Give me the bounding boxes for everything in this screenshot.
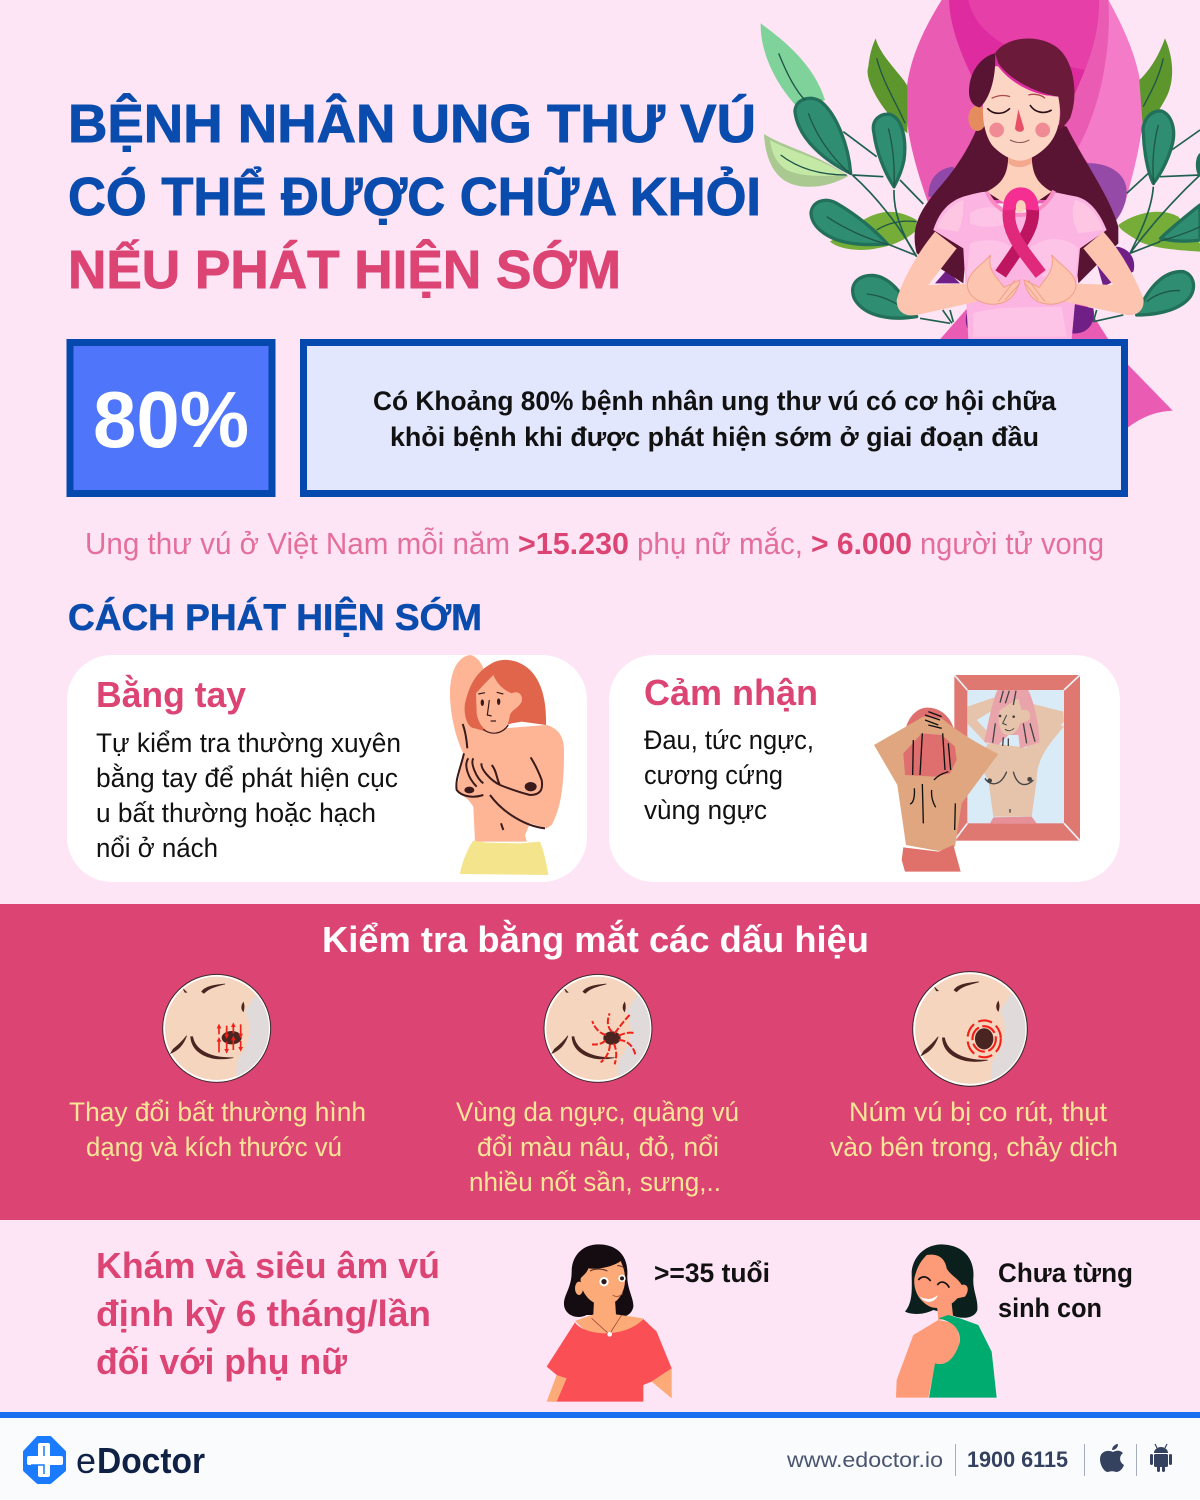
chest ribbon xyxy=(1001,194,1041,274)
illustration: self-check by hand xyxy=(450,655,564,875)
statistics line: > 6.000 xyxy=(811,527,912,561)
panel: by feeling xyxy=(609,655,1120,882)
label: never given birth: sinh con xyxy=(998,1293,1102,1323)
big ribbon behind woman xyxy=(906,0,1173,428)
caption: shape change xyxy=(69,1097,366,1162)
arms and hands xyxy=(897,232,1144,315)
title xyxy=(68,93,761,300)
woman figure xyxy=(915,38,1118,339)
statistics line: >15.230 xyxy=(518,527,629,561)
caption: nipple retraction xyxy=(830,1097,1118,1162)
card heading: Cảm nhận xyxy=(644,672,818,713)
caption: skin color change: đổi màu nâu, đỏ, nổi xyxy=(477,1132,719,1162)
purple shapes xyxy=(928,163,1134,333)
card body xyxy=(96,728,401,863)
illustration: woman in red shirt xyxy=(547,1244,672,1402)
card body: cương cứng xyxy=(644,760,783,790)
stat description box: khỏi bệnh khi được phát hiện sớm ở giai đoạn đầu xyxy=(390,422,1039,452)
stat description box: Có Khoảng 80% bệnh nhân ung thư vú có cơ hội chữa xyxy=(373,386,1057,416)
illustration: woman in green tank top xyxy=(896,1244,997,1398)
caption: shape change: dạng và kích thước vú xyxy=(86,1132,342,1162)
card body: Tự kiểm tra thường xuyên xyxy=(96,728,401,758)
screening advice text: định kỳ 6 tháng/lần xyxy=(96,1293,431,1334)
card body: bằng tay để phát hiện cục xyxy=(96,763,398,793)
card body: nổi ở nách xyxy=(96,833,218,863)
screening advice text xyxy=(96,1245,440,1382)
icon: shape change xyxy=(163,974,271,1082)
title line 2: CÓ THỂ ĐƯỢC CHỮA KHỎI xyxy=(68,167,761,227)
card heading: Bằng tay xyxy=(96,673,246,715)
brand name: Doctor xyxy=(97,1440,205,1481)
stat description box xyxy=(304,342,1124,494)
stat box: 80%: 80% xyxy=(93,375,249,464)
caption: skin color change xyxy=(456,1097,739,1197)
screening advice text: Khám và siêu âm vú xyxy=(96,1245,440,1286)
title line 1: BỆNH NHÂN UNG THƯ VÚ xyxy=(68,93,756,154)
card body: vùng ngực xyxy=(644,795,767,825)
statistics line xyxy=(85,526,1104,561)
illustration: woman with pink ribbon and leaves xyxy=(761,0,1200,428)
stat box: 80% xyxy=(70,342,272,494)
age label: >=35 tuổi xyxy=(654,1258,770,1288)
caption: shape change: Thay đổi bất thường hình xyxy=(69,1097,366,1127)
icon: eDoctor logo xyxy=(25,1438,64,1482)
caption: nipple retraction: Núm vú bị co rút, thụt xyxy=(849,1097,1108,1127)
band heading: Kiểm tra bằng mắt các dấu hiệu xyxy=(322,918,869,960)
illustration: checking in a mirror xyxy=(874,675,1080,872)
screening advice text: đối với phụ nữ xyxy=(96,1341,348,1382)
statistics line: người tử vong xyxy=(920,527,1104,561)
label: never given birth: Chưa từng xyxy=(998,1258,1133,1288)
leaves right xyxy=(1093,38,1200,322)
statistics line: phụ nữ mắc, xyxy=(637,526,803,561)
card body xyxy=(644,725,814,825)
footer xyxy=(0,1412,1200,1500)
section heading: CÁCH PHÁT HIỆN SỚM xyxy=(68,596,482,638)
leaves left xyxy=(761,23,953,323)
icon: nipple retraction xyxy=(913,972,1027,1086)
panel: visual check band xyxy=(0,904,1200,1220)
brand name: e xyxy=(76,1440,96,1481)
icon: apple xyxy=(1100,1444,1124,1472)
icon: android xyxy=(1150,1444,1172,1472)
phone number: 1900 6115 xyxy=(967,1447,1068,1472)
label: never given birth xyxy=(998,1258,1133,1323)
card body: u bất thường hoặc hạch xyxy=(96,798,376,828)
icon: skin color change xyxy=(544,974,652,1082)
website: www.edoctor.io xyxy=(786,1449,943,1472)
caption: skin color change: nhiều nốt sần, sưng,.. xyxy=(469,1167,721,1197)
title line 3: NẾU PHÁT HIỆN SỚM xyxy=(68,239,621,300)
panel: by hand xyxy=(67,655,587,882)
statistics line: Ung thư vú ở Việt Nam mỗi năm xyxy=(85,526,510,561)
card body: Đau, tức ngực, xyxy=(644,725,814,755)
caption: nipple retraction: vào bên trong, chảy dịch xyxy=(830,1132,1118,1162)
caption: skin color change: Vùng da ngực, quầng vú xyxy=(456,1097,739,1127)
